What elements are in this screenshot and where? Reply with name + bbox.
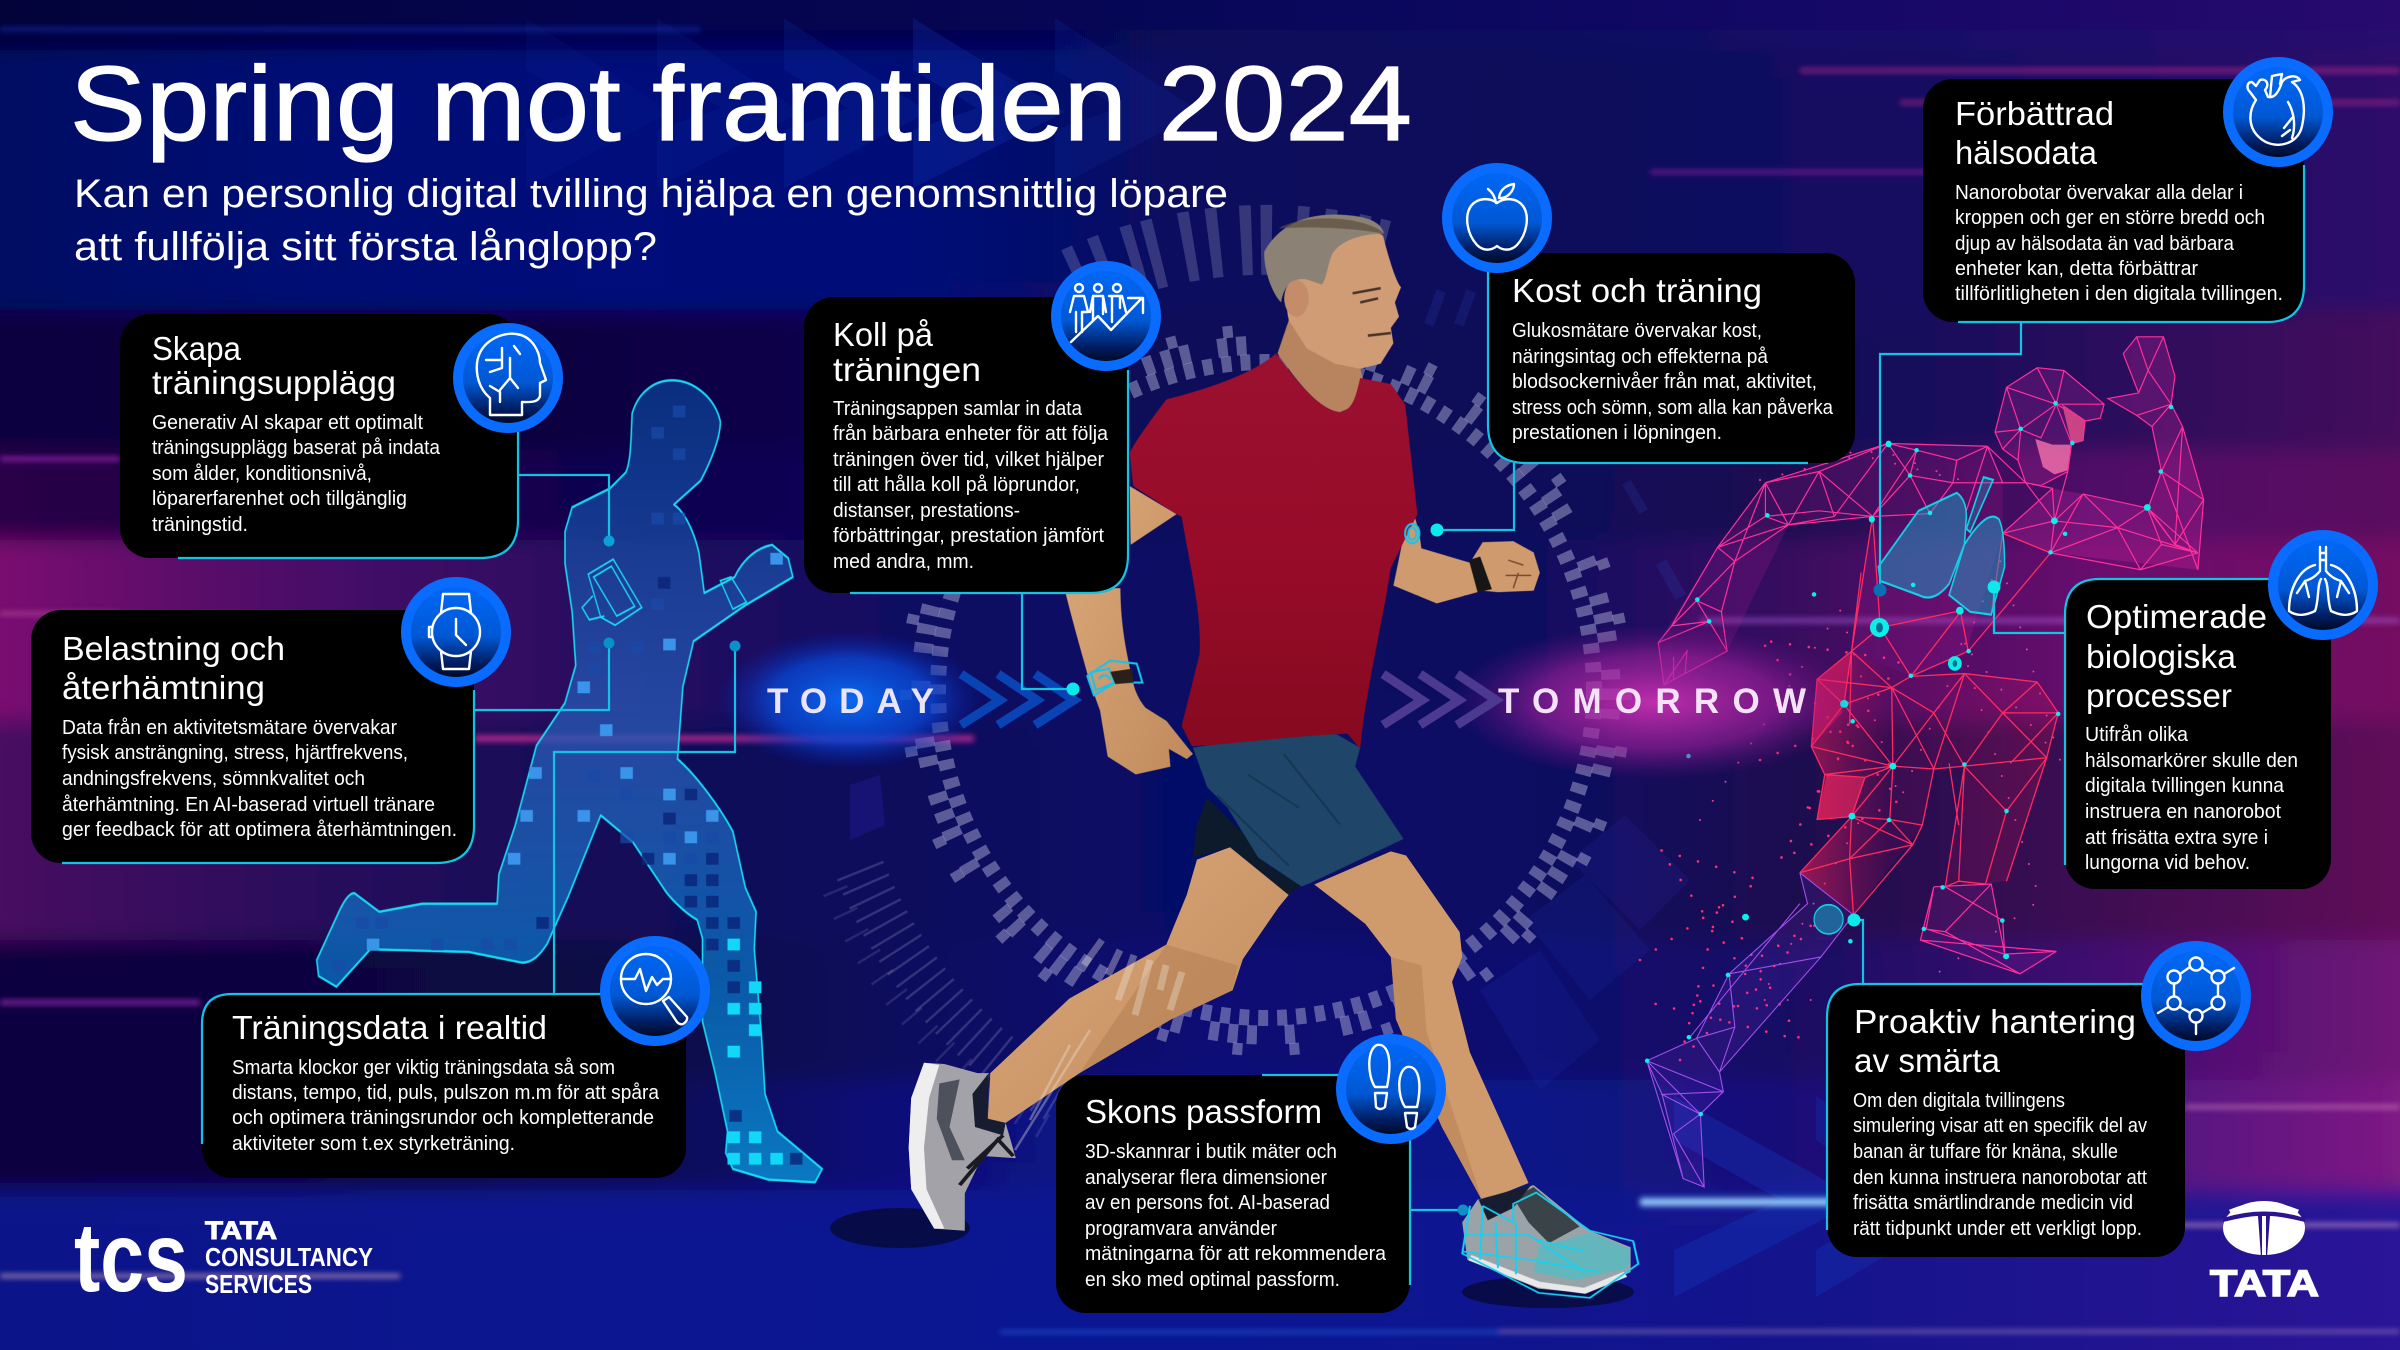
panel: Koll på träningen bbox=[804, 261, 1161, 696]
body text: mätningarna för att rekommendera bbox=[1085, 1243, 1387, 1265]
body text: träningstid. bbox=[152, 514, 248, 536]
heading bbox=[62, 630, 285, 706]
body text: och optimera träningsrundor och kompletterande bbox=[232, 1107, 654, 1129]
body text: analyserar flera dimensioner bbox=[1085, 1167, 1327, 1189]
tomorrow label bbox=[1383, 624, 1860, 780]
panel: Skapa träningsupplägg bbox=[120, 314, 614, 558]
panel: Belastning och återhämtning bbox=[31, 577, 614, 863]
front arm bbox=[1393, 507, 1540, 603]
silhouette body bbox=[317, 380, 822, 1182]
circular tick ring bbox=[835, 240, 1626, 1130]
wearable sensors bbox=[1087, 524, 1419, 695]
panel: Optimerade biologiska processer bbox=[1988, 530, 2378, 889]
tomorrow label: TOMORROW bbox=[1498, 682, 1806, 721]
shirt bbox=[1130, 353, 1417, 749]
panel border and connector bbox=[1440, 272, 1808, 530]
icon: heart bbox=[2223, 57, 2333, 167]
hair bbox=[1264, 215, 1384, 302]
body text: med andra, mm. bbox=[833, 551, 974, 573]
heading: Kost och träning bbox=[1512, 272, 1762, 309]
heading: Skapa bbox=[152, 330, 242, 367]
title: Spring mot framtiden 2024 bbox=[70, 45, 1412, 163]
heading: återhämtning bbox=[62, 669, 265, 706]
body text: enheter kan, detta förbättrar bbox=[1955, 258, 2198, 280]
body text bbox=[232, 1057, 660, 1155]
logo: TCS: CONSULTANCY bbox=[205, 1242, 373, 1272]
panel: Träningsdata i realtid bbox=[202, 640, 740, 1178]
panel border and connector bbox=[1262, 1075, 1460, 1285]
body text: Generativ AI skapar ett optimalt bbox=[152, 412, 423, 434]
body text: från bärbara enheter för att följa bbox=[833, 423, 1109, 445]
body text: återhämtning. En AI-baserad virtuell tränare bbox=[62, 794, 435, 816]
body text: Om den digitala tvillingens bbox=[1853, 1090, 2065, 1112]
body text: blodsockernivåer från mat, aktivitet, bbox=[1512, 371, 1817, 393]
heading bbox=[833, 316, 981, 388]
today label: TODAY bbox=[767, 682, 934, 721]
heading bbox=[1854, 1003, 2136, 1079]
body text: Data från en aktivitetsmätare övervakar bbox=[62, 717, 397, 739]
white ground streak bbox=[1640, 1196, 1830, 1208]
leading leg bbox=[1314, 851, 1529, 1202]
back shoe bbox=[909, 1063, 1016, 1231]
mesh lines feet bbox=[1920, 884, 2056, 974]
body text: lungorna vid behov. bbox=[2085, 852, 2250, 874]
body text: som ålder, konditionsnivå, bbox=[152, 463, 372, 485]
icon: magnifier pulse bbox=[600, 936, 710, 1046]
panel border and connector bbox=[62, 644, 609, 863]
body text: hälsomarkörer skulle den bbox=[2085, 750, 2298, 772]
body text: Glukosmätare övervakar kost, bbox=[1512, 320, 1762, 342]
panel: Kost och träning bbox=[1430, 163, 1855, 536]
body text: frisätta smärtlindrande medicin vid bbox=[1853, 1192, 2133, 1214]
body text: näringsintag och effekterna på bbox=[1512, 346, 1769, 368]
icon: footprints bbox=[1336, 1034, 1446, 1144]
trailing leg bbox=[988, 847, 1289, 1123]
icon: apple bbox=[1442, 163, 1552, 273]
body text: förbättringar, prestation jämfört bbox=[833, 525, 1104, 547]
heading: träningen bbox=[833, 351, 981, 388]
body text: simulering visar att en specifik del av bbox=[1853, 1115, 2147, 1137]
panel border and connector bbox=[202, 648, 735, 1144]
figure translucent fills bbox=[1647, 337, 2204, 1187]
body text bbox=[1512, 320, 1834, 444]
back arm bbox=[1064, 486, 1193, 774]
data pixels bright bbox=[367, 553, 783, 950]
data pixels dim bbox=[333, 406, 719, 972]
decorative chevrons top bbox=[526, 18, 1200, 188]
body text: Nanorobotar övervakar alla delar i bbox=[1955, 182, 2243, 204]
subtitle: att fullfölja sitt första långlopp? bbox=[74, 225, 657, 269]
data pixels cyan bbox=[727, 939, 783, 1165]
nodes bbox=[1645, 401, 2173, 1116]
today arrows bbox=[961, 674, 1074, 725]
body text bbox=[1085, 1141, 1387, 1291]
body text: kroppen och ger en större bredd och bbox=[1955, 207, 2265, 229]
body text: aktiviteter som t.ex styrketräning. bbox=[232, 1133, 515, 1155]
body text: löparerfarenhet och tillgänglig bbox=[152, 488, 407, 510]
subtitle bbox=[74, 172, 1228, 269]
neck and face bbox=[1278, 233, 1401, 412]
body text bbox=[1955, 182, 2283, 305]
body text: Smarta klockor ger viktig träningsdata så som bbox=[232, 1057, 615, 1079]
panel: Förbättrad hälsodata bbox=[1874, 57, 2333, 596]
logo: TCS: TATA bbox=[205, 1217, 277, 1245]
body text bbox=[2085, 724, 2298, 874]
body text: stress och sömn, som alla kan påverka bbox=[1512, 397, 1834, 419]
icon: people and trend bbox=[1051, 261, 1161, 371]
icon: watch bbox=[401, 577, 511, 687]
panel: Skons passform bbox=[1056, 1034, 1468, 1313]
ticks over calf bbox=[1015, 940, 1182, 1150]
particle clouds bbox=[1640, 440, 2060, 1060]
icon: molecule bbox=[2141, 941, 2251, 1051]
heading: Skons passform bbox=[1085, 1093, 1322, 1130]
body text: banan är tuffare för knäna, skulle bbox=[1853, 1141, 2118, 1163]
knee sensor bbox=[1814, 905, 1843, 934]
panel border and connector bbox=[178, 432, 609, 558]
body text: Träningsappen samlar in data bbox=[833, 398, 1083, 420]
subtitle: Kan en personlig digital tvilling hjälpa en genomsnittlig löpare bbox=[74, 172, 1228, 216]
body text: rätt tidpunkt under ett verkligt lopp. bbox=[1853, 1218, 2142, 1240]
body text: prestationen i löpningen. bbox=[1512, 422, 1722, 444]
panel border and connector bbox=[1994, 579, 2270, 865]
body text: 3D-skannrar i butik mäter och bbox=[1085, 1141, 1337, 1163]
icon: AI head bbox=[453, 323, 563, 433]
logo: TCS: SERVICES bbox=[205, 1269, 312, 1299]
logo: Tata bbox=[2210, 1201, 2319, 1304]
body text: programvara använder bbox=[1085, 1218, 1277, 1240]
body text: till att hålla koll på löprundor, bbox=[833, 474, 1080, 496]
body text: träningen över tid, vilket hjälper bbox=[833, 449, 1104, 471]
body text: instruera en nanorobot bbox=[2085, 801, 2281, 823]
body text: fysisk ansträngning, stress, hjärtfrekvens, bbox=[62, 742, 408, 764]
today label bbox=[715, 630, 1074, 770]
lungs bbox=[1878, 477, 2005, 615]
binary digits faint bbox=[1424, 289, 1686, 600]
mesh lines torso bbox=[1800, 516, 2058, 915]
foot shadows bbox=[830, 1208, 1634, 1308]
body text: en sko med optimal passform. bbox=[1085, 1269, 1340, 1291]
icon: lungs bbox=[2268, 530, 2378, 640]
panel border and connector bbox=[850, 370, 1128, 689]
panel: Proaktiv hantering av smärta bbox=[1827, 914, 2251, 1257]
body text: andningsfrekvens, sömnkvalitet och bbox=[62, 768, 365, 790]
heading bbox=[1955, 95, 2114, 171]
digital twin wireframe figure bbox=[1640, 337, 2204, 1187]
heading: processer bbox=[2086, 677, 2232, 714]
heading: Förbättrad bbox=[1955, 95, 2114, 132]
body text: den kunna instruera nanorobotar att bbox=[1853, 1167, 2147, 1189]
body text bbox=[1853, 1090, 2147, 1240]
body text: Utifrån olika bbox=[2085, 724, 2189, 746]
runner photo figure bbox=[830, 215, 1638, 1308]
tomorrow arrows bbox=[1383, 674, 1496, 725]
heading: Koll på bbox=[833, 316, 934, 353]
body text bbox=[62, 717, 457, 841]
heading: Optimerade bbox=[2086, 598, 2267, 635]
front shoe bbox=[1462, 1185, 1631, 1293]
body text: träningsupplägg baserat på indata bbox=[152, 437, 441, 459]
data pixels dark bbox=[536, 577, 802, 1165]
mesh lines upper bbox=[1658, 337, 2204, 685]
heading: Belastning och bbox=[62, 630, 285, 667]
body text: distans, tempo, tid, puls, pulszon m.m för att spåra bbox=[232, 1082, 660, 1104]
digital runner silhouette bbox=[317, 380, 822, 1182]
heading: hälsodata bbox=[1955, 134, 2098, 171]
body text bbox=[152, 412, 441, 536]
heading: Proaktiv hantering bbox=[1854, 1003, 2136, 1040]
shorts bbox=[1193, 797, 1302, 895]
panel border and connector bbox=[1880, 165, 2304, 588]
heading: Träningsdata i realtid bbox=[232, 1009, 547, 1046]
armband phone bbox=[582, 559, 746, 625]
heading: biologiska bbox=[2086, 638, 2237, 675]
heading: träningsupplägg bbox=[152, 364, 396, 401]
body text: digitala tvillingen kunna bbox=[2085, 775, 2285, 797]
heading: av smärta bbox=[1854, 1042, 2001, 1079]
body text: att frisätta extra syre i bbox=[2085, 827, 2268, 849]
body text bbox=[833, 398, 1109, 573]
body text: djup av hälsodata än vad bärbara bbox=[1955, 233, 2235, 255]
logo: TCS bbox=[74, 1202, 373, 1312]
body text: tillförlitligheten i den digitala tvillingen. bbox=[1955, 283, 2283, 305]
heading bbox=[152, 330, 396, 401]
logo: Tata: TATA bbox=[2210, 1263, 2319, 1304]
logo: TCS: tcs bbox=[74, 1202, 188, 1312]
heading bbox=[2086, 598, 2267, 714]
decorative chevrons and blocks lower right bbox=[850, 775, 1980, 1297]
body text: ger feedback för att optimera återhämtningen. bbox=[62, 819, 457, 841]
ear bbox=[1284, 280, 1309, 317]
body text: distanser, prestations- bbox=[833, 500, 1020, 522]
body text: av en persons fot. AI-baserad bbox=[1085, 1192, 1330, 1214]
panel border and connector bbox=[1827, 920, 2150, 1230]
